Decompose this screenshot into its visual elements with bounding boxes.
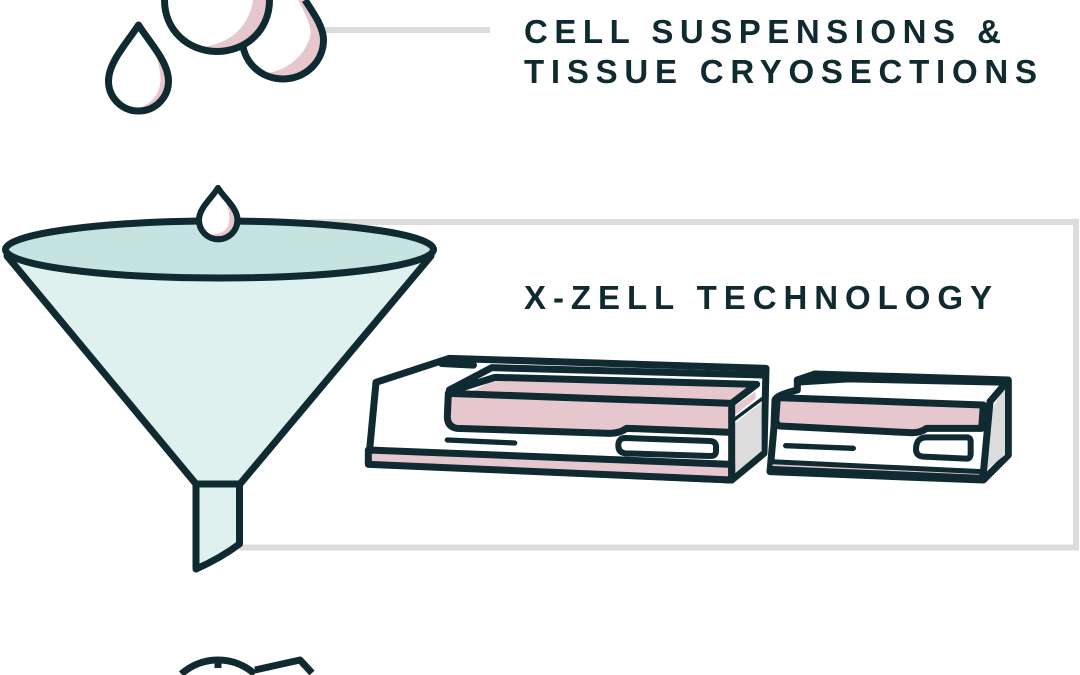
small instrument side panel xyxy=(984,387,1005,472)
heading: technology: X-ZELL TECHNOLOGY xyxy=(524,279,992,316)
instrument right edge xyxy=(721,432,742,480)
small instrument base strip xyxy=(770,462,982,477)
icon: partially visible device at bottom xyxy=(181,660,312,674)
droplet: right xyxy=(242,0,324,79)
icon: funnel xyxy=(6,188,434,569)
small instrument body xyxy=(770,374,1008,480)
instrument tray front xyxy=(447,393,732,433)
instrument hinge xyxy=(442,363,473,365)
instrument tray side edge xyxy=(735,399,762,419)
icon: large instrument xyxy=(368,358,766,480)
instrument lid lines xyxy=(449,368,765,403)
instrument base strip xyxy=(368,450,732,480)
technology frame xyxy=(240,222,1076,548)
funnel spout xyxy=(196,484,240,569)
small instrument label line xyxy=(786,446,853,448)
small instrument slot xyxy=(916,437,971,459)
instrument slot xyxy=(618,438,716,456)
instrument tray side xyxy=(734,392,756,416)
heading: inputs xyxy=(524,13,1037,90)
funnel rim xyxy=(6,221,434,278)
instrument body xyxy=(368,358,766,480)
heading: inputs: CELL SUSPENSIONS & xyxy=(524,13,1001,50)
instrument side panel xyxy=(735,402,762,473)
funnel droplet xyxy=(199,188,238,239)
connector line: droplets to label xyxy=(325,27,490,33)
icon: droplets xyxy=(108,0,324,111)
droplet: small left xyxy=(108,25,168,111)
small instrument top cover xyxy=(797,374,1008,384)
small instrument tray front xyxy=(776,398,983,433)
small instrument lid edge xyxy=(983,384,1005,473)
icon: small instrument xyxy=(770,374,1008,480)
funnel cone xyxy=(7,256,431,484)
instrument label line xyxy=(447,440,515,443)
instrument tray top xyxy=(472,378,757,402)
heading: inputs: TISSUE CRYOSECTIONS xyxy=(524,53,1037,90)
droplet: large centre xyxy=(164,0,270,52)
